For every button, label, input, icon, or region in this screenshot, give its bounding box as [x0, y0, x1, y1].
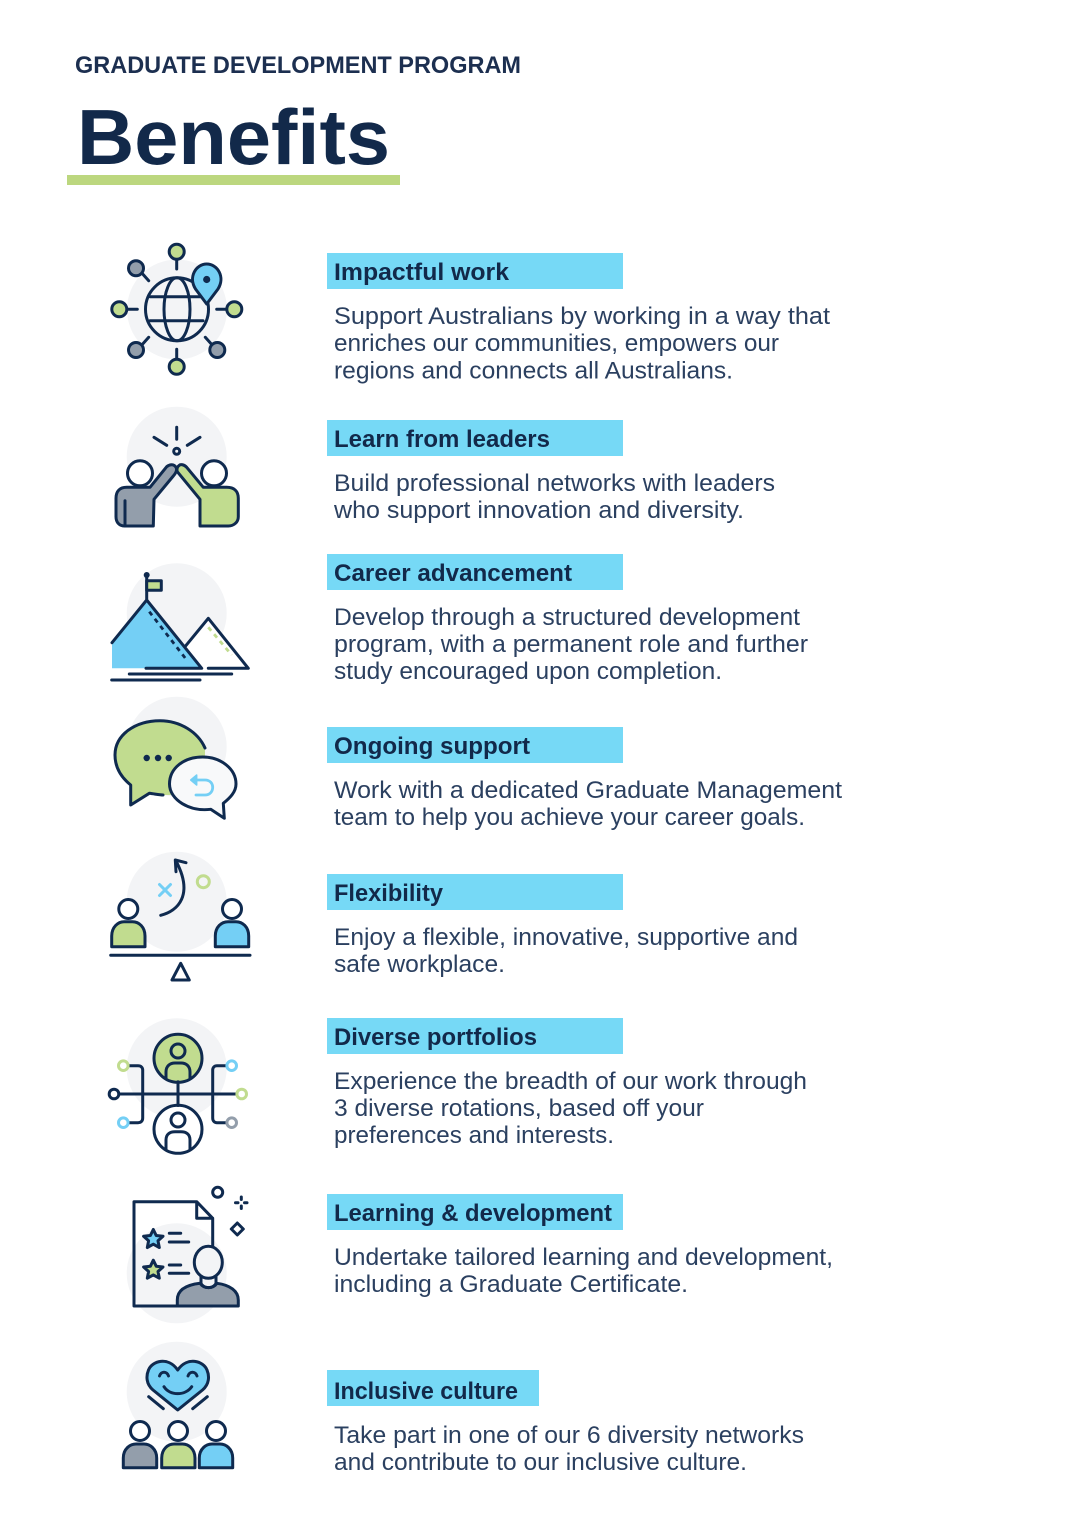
panel: ongoing support [115, 697, 842, 831]
icon: smiling heart with people [123, 1342, 233, 1468]
heading bar: learn from leaders: Learn from leaders [334, 426, 550, 453]
panel: learning and development [127, 1187, 833, 1323]
panel: learn from leaders [116, 407, 775, 526]
panel: career advancement [112, 554, 808, 685]
text: career advancement: Develop through a structured development [334, 604, 800, 631]
text: impactful work: Support Australians by working in a way that [334, 303, 830, 330]
heading bar: impactful work [327, 253, 623, 289]
text: ongoing support [334, 777, 842, 831]
text: diverse portfolios: 3 diverse rotations, based off your [334, 1095, 704, 1122]
heading bar: flexibility: Flexibility [334, 880, 444, 907]
text: flexibility [334, 924, 798, 978]
text: diverse portfolios: Experience the breadth of our work through [334, 1068, 807, 1095]
text: learning and development [334, 1244, 833, 1298]
icon: balance with two people [111, 852, 250, 980]
text: impactful work [334, 303, 830, 384]
title: Benefits [77, 93, 390, 181]
panel: inclusive culture [123, 1342, 804, 1476]
text: career advancement: program, with a permanent role and further [334, 631, 808, 658]
text: inclusive culture: and contribute to our inclusive culture. [334, 1449, 747, 1476]
text: impactful work: enriches our communities, empowers our [334, 330, 779, 357]
heading bar: career advancement [327, 554, 623, 590]
heading bar: flexibility [327, 874, 623, 910]
text: diverse portfolios: preferences and interests. [334, 1122, 614, 1149]
text: learn from leaders [333, 470, 775, 524]
icon: speech bubbles [115, 697, 236, 818]
text: impactful work: regions and connects all Australians. [334, 358, 733, 384]
heading bar: career advancement: Career advancement [334, 560, 572, 587]
icon: high five [116, 407, 238, 526]
text: ongoing support: team to help you achieve your career goals. [334, 804, 805, 831]
text: diverse portfolios [334, 1068, 807, 1149]
text: inclusive culture [334, 1422, 804, 1476]
title underline [67, 175, 400, 185]
heading bar: diverse portfolios [327, 1018, 623, 1054]
icon: connected people network [109, 1018, 246, 1153]
heading bar: ongoing support [327, 727, 623, 763]
text: learning and development: Undertake tailored learning and development, [334, 1244, 833, 1271]
icon: globe with pin [112, 244, 242, 374]
heading bar: inclusive culture: Inclusive culture [334, 1378, 518, 1405]
text: flexibility: safe workplace. [334, 951, 505, 978]
panel: impactful work [112, 244, 830, 384]
text: inclusive culture: Take part in one of our 6 diversity networks [334, 1422, 804, 1449]
eyebrow heading: GRADUATE DEVELOPMENT PROGRAM [75, 52, 521, 79]
text: learn from leaders: Build professional networks with leaders [334, 470, 775, 497]
heading bar: impactful work: Impactful work [334, 259, 510, 286]
heading bar: learning and development: Learning & development [334, 1200, 612, 1227]
text: ongoing support: Work with a dedicated Graduate Management [334, 777, 842, 804]
icon: mountains with flag [112, 563, 248, 680]
text: learn from leaders: who support innovation and diversity. [333, 497, 744, 524]
panel: diverse portfolios [109, 1018, 807, 1153]
heading bar: ongoing support: Ongoing support [334, 733, 530, 760]
text: learning and development: including a Graduate Certificate. [334, 1271, 688, 1298]
panel: flexibility [111, 852, 798, 980]
text: career advancement: study encouraged upon completion. [334, 658, 722, 685]
text: career advancement [334, 604, 808, 685]
text: flexibility: Enjoy a flexible, innovative, supportive and [334, 924, 798, 951]
heading bar: diverse portfolios: Diverse portfolios [334, 1024, 537, 1051]
icon: document with person [127, 1187, 247, 1323]
heading bar: learn from leaders [327, 420, 623, 456]
heading bar: inclusive culture [327, 1370, 539, 1406]
